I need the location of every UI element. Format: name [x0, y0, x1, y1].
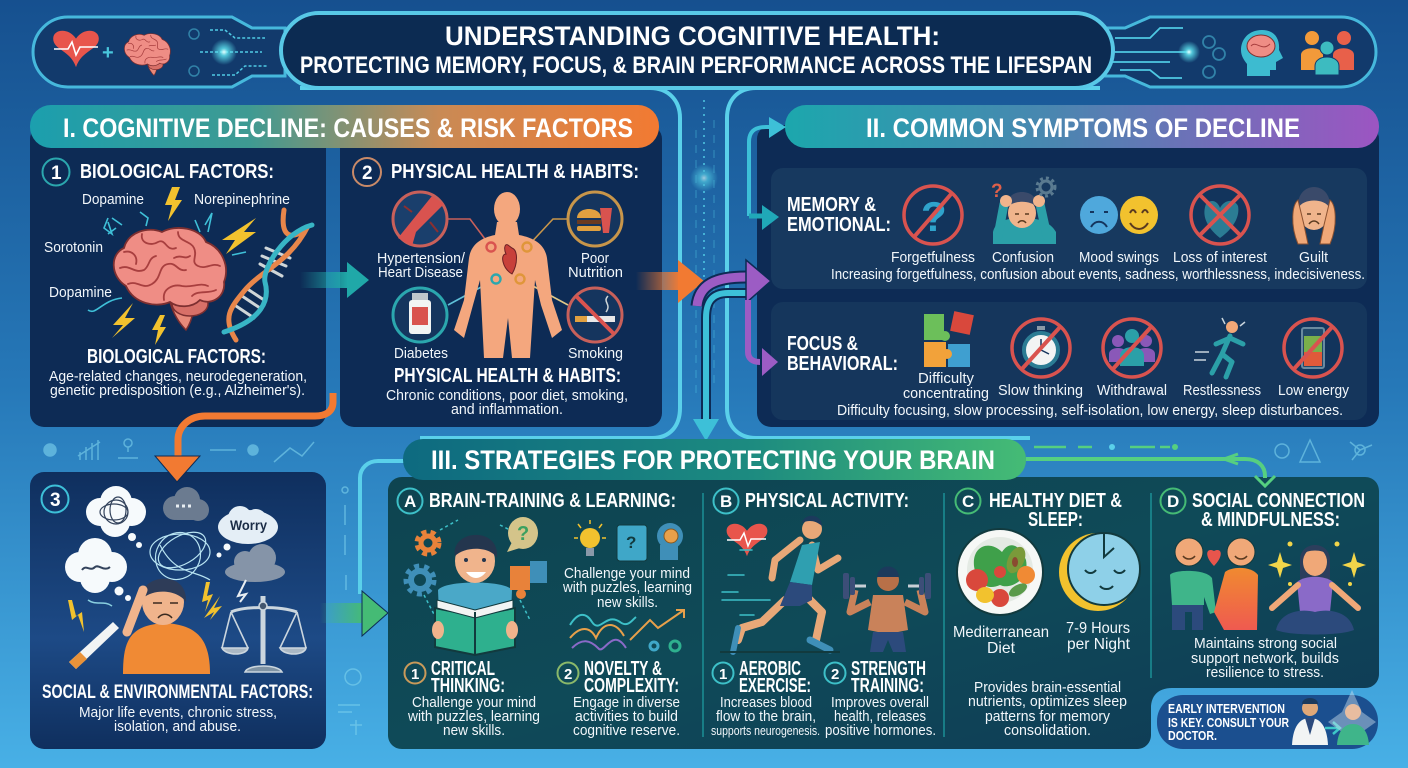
point 1 text: new skills.	[443, 722, 505, 739]
description: resilience to stress.	[1206, 664, 1324, 681]
description: isolation, and abuse.	[114, 718, 241, 735]
icon: group of people	[1301, 31, 1354, 75]
icon: question bubble: ?	[517, 523, 529, 545]
badge A: A	[404, 492, 416, 511]
description: and inflammation.	[451, 401, 563, 418]
callout text: EARLY INTERVENTION	[1168, 701, 1285, 716]
heading: HEALTHY DIET &	[989, 490, 1122, 512]
point 1 text: supports neurogenesis.	[711, 723, 820, 738]
icon: patient with glow	[1328, 690, 1376, 745]
point 1: THINKING:	[431, 675, 505, 697]
callout text: DOCTOR.	[1168, 728, 1217, 743]
arrow: social to strategies	[320, 461, 404, 636]
subpanel: memory and emotional	[771, 168, 1367, 289]
label: poor nutrition	[568, 250, 623, 281]
description: patterns for memory	[985, 708, 1110, 725]
plus sign: +	[102, 42, 114, 64]
symptom labels	[903, 370, 1349, 402]
arrow: biological to physical	[300, 262, 369, 298]
description: nutrients, optimizes sleep	[968, 693, 1127, 710]
label: sleep hours: per Night	[1067, 636, 1131, 653]
panel: strategies	[388, 477, 1379, 749]
icon: slow thinking	[1012, 319, 1070, 377]
point 2 text: Engage in diverse	[573, 694, 680, 711]
connector: title to panels	[300, 88, 1100, 438]
point 1 text	[711, 694, 820, 738]
point 2: 2	[831, 666, 839, 683]
section II header	[785, 105, 1379, 148]
point 2	[558, 658, 679, 697]
ground line	[720, 651, 840, 653]
icon: salad plate	[957, 529, 1043, 615]
point 1 text	[407, 694, 540, 739]
text block: Challenge your mind	[564, 565, 690, 582]
heading: BRAIN-TRAINING & LEARNING:	[429, 490, 676, 512]
symptom labels	[891, 249, 1329, 266]
icon: doctor	[1292, 698, 1328, 745]
label: mediterranean diet: Diet	[987, 640, 1016, 657]
symptom labels: Confusion	[992, 249, 1054, 266]
icon: question bubble	[507, 517, 538, 552]
subheading: PHYSICAL HEALTH & HABITS:	[394, 365, 621, 387]
subheading: SOCIAL & ENVIRONMENTAL FACTORS:	[42, 682, 313, 703]
icon: meditating woman	[1268, 542, 1366, 634]
description: Chronic conditions, poor diet, smoking,	[386, 387, 628, 404]
icon: moon clock	[1059, 533, 1140, 611]
column C: diet and sleep	[953, 488, 1140, 739]
symptom labels: Withdrawal	[1097, 382, 1167, 399]
arrow	[1325, 722, 1340, 734]
column D: social and mindfulness	[1160, 488, 1366, 681]
badge 2	[353, 158, 381, 186]
icon: loss of interest	[1191, 186, 1249, 244]
point 2 text: Improves overall	[831, 694, 929, 711]
point 2 text: activities to build	[575, 708, 678, 725]
icon: forgetfulness: ?	[921, 193, 947, 240]
text block: new skills.	[597, 594, 658, 611]
icon: puzzle	[924, 311, 974, 367]
label: sleep hours	[1066, 620, 1131, 653]
badge 3	[42, 486, 68, 512]
row heading: BEHAVIORAL:	[787, 353, 898, 375]
badge 1	[42, 158, 70, 186]
header right pill: people icons	[1100, 17, 1376, 87]
panel: physical health and habits	[340, 125, 662, 427]
column dividers	[703, 493, 1151, 737]
description: Maintains strong social	[1194, 635, 1337, 652]
badge C	[956, 488, 980, 514]
icon: balance scale	[222, 596, 306, 672]
description: Difficulty focusing, slow processing, self-isolation, low energy, sleep disturbances.	[837, 402, 1343, 419]
row heading	[787, 194, 891, 236]
circuit lines	[189, 29, 268, 76]
text block: with puzzles, learning	[562, 579, 692, 596]
symptom labels: Low energy	[1278, 382, 1349, 399]
text block	[562, 565, 692, 611]
column B: physical activity	[711, 488, 936, 739]
point 2 text	[573, 694, 680, 739]
heading: PHYSICAL ACTIVITY:	[745, 490, 909, 512]
symptom labels: Difficulty	[918, 370, 974, 387]
point 2: TRAINING:	[851, 675, 924, 697]
badge D: D	[1167, 492, 1179, 511]
label: hypertension: Heart Disease	[378, 264, 463, 281]
icon: stressed person	[123, 579, 210, 674]
central circuit decoration	[690, 100, 718, 420]
arrow: decline to panel 3	[155, 393, 333, 482]
label: sleep hours: 7-9 Hours	[1066, 620, 1130, 637]
description: Provides brain-essential	[974, 679, 1121, 696]
label: diabetes: Diabetes	[394, 345, 448, 362]
point 1 text: with puzzles, learning	[407, 708, 540, 725]
icon: DNA helix	[224, 210, 312, 340]
point 2 text: positive hormones.	[825, 722, 936, 739]
badge 3: 3	[50, 490, 61, 511]
label: poor nutrition: Poor	[581, 250, 609, 267]
section III header	[403, 439, 1026, 480]
point 2: NOVELTY &	[584, 658, 662, 680]
icon: withdrawal	[1103, 319, 1161, 377]
icon: confusion: ?	[991, 181, 1003, 202]
point 2: STRENGTH	[851, 658, 926, 680]
badge D	[1160, 488, 1186, 514]
row heading: MEMORY &	[787, 194, 876, 216]
heading	[989, 490, 1122, 531]
connector lines	[448, 219, 568, 305]
badge B	[714, 488, 738, 514]
icon: confusion	[991, 178, 1056, 244]
connector: strategies to social column	[1026, 444, 1275, 486]
icon: bulb, card and head	[574, 520, 683, 561]
icon: burger and drink	[568, 192, 622, 246]
icon: artery	[393, 192, 447, 246]
point 1: 1	[411, 666, 419, 683]
neurotransmitter labels: Norepinephrine	[194, 191, 290, 208]
label: mediterranean diet	[953, 624, 1049, 657]
label: poor nutrition: Nutrition	[568, 264, 623, 281]
heading text: II. COMMON SYMPTOMS OF DECLINE	[866, 113, 1300, 143]
icon: head with brain	[1241, 30, 1283, 76]
title	[281, 13, 1113, 88]
icon: low energy	[1284, 319, 1342, 377]
neurotransmitter labels: Sorotonin	[44, 239, 103, 256]
point 1: 1	[719, 666, 727, 683]
icon: waves and trend	[570, 610, 684, 651]
symptom labels: Guilt	[1299, 249, 1329, 266]
icon: brain	[124, 34, 170, 75]
heading text: I. COGNITIVE DECLINE: CAUSES & RISK FACTORS	[63, 113, 633, 143]
circuit lines	[1112, 28, 1225, 78]
subpanel: focus and behavioral	[771, 302, 1367, 420]
label: hypertension	[377, 250, 466, 281]
icon: thought clouds: Worry	[230, 517, 267, 533]
description: Major life events, chronic stress,	[79, 704, 277, 721]
icon: human body	[454, 192, 562, 358]
point 1 text: Increases blood	[720, 694, 812, 711]
row heading: FOCUS &	[787, 333, 858, 355]
heading: BIOLOGICAL FACTORS:	[80, 161, 274, 183]
icon: molecule squiggles	[88, 212, 246, 311]
badge 2: 2	[362, 163, 373, 184]
subheading: BIOLOGICAL FACTORS:	[87, 346, 266, 368]
title line 1: UNDERSTANDING COGNITIVE HEALTH:	[445, 21, 940, 51]
point 2: 2	[564, 666, 572, 683]
icon: puzzle pieces	[510, 561, 547, 599]
icon: mood swings	[1080, 196, 1158, 234]
point 1 text: Challenge your mind	[412, 694, 536, 711]
icon: guilt	[1293, 187, 1335, 244]
icon: lightning bolts	[112, 187, 256, 345]
row heading	[787, 333, 898, 375]
description	[49, 368, 307, 399]
section I header	[30, 105, 659, 148]
point 2: COMPLEXITY:	[584, 675, 679, 697]
arrow: physical to symptoms	[636, 260, 704, 303]
title line 2: PROTECTING MEMORY, FOCUS, & BRAIN PERFORMANCE ACROSS THE LIFESPAN	[300, 52, 1092, 79]
heading: SLEEP:	[1028, 509, 1083, 531]
point 1	[712, 658, 811, 697]
panel: common symptoms	[757, 125, 1379, 427]
neurotransmitter labels: Dopamine	[82, 191, 144, 208]
symptom labels: Restlessness	[1183, 382, 1261, 399]
icon: forgetfulness	[904, 186, 962, 244]
column A: brain training	[398, 488, 692, 739]
badge C: C	[962, 492, 974, 511]
callout text	[1168, 701, 1289, 743]
heading: PHYSICAL HEALTH & HABITS:	[391, 161, 639, 183]
badge B: B	[720, 492, 732, 511]
header left pill: heart and brain	[33, 17, 285, 87]
label: mediterranean diet: Mediterranean	[953, 624, 1049, 641]
neurotransmitter labels	[44, 191, 290, 301]
row heading: EMOTIONAL:	[787, 214, 891, 236]
icon: couple	[1170, 538, 1258, 630]
point 2 text	[825, 694, 936, 739]
heading: SOCIAL CONNECTION	[1192, 490, 1365, 512]
icon: medicine bottle	[393, 288, 447, 342]
icon: weightlifter	[843, 566, 931, 652]
point 2 text: health, releases	[834, 708, 926, 725]
icon: heart	[53, 31, 99, 67]
icon: cigarette	[69, 600, 119, 669]
heading	[1192, 490, 1365, 531]
badge A	[398, 488, 422, 514]
symptom labels: Mood swings	[1079, 249, 1159, 266]
heading text: III. STRATEGIES FOR PROTECTING YOUR BRAIN	[431, 445, 995, 475]
point 2	[824, 658, 926, 697]
point 1: EXERCISE:	[739, 675, 811, 697]
icon: brain	[114, 228, 226, 330]
point 2 text: cognitive reserve.	[573, 722, 680, 739]
description	[79, 704, 277, 735]
description: consolidation.	[1004, 722, 1091, 739]
icon: no smoking	[568, 288, 622, 342]
icon: thought clouds	[65, 486, 285, 602]
point 1: AEROBIC	[739, 658, 801, 680]
icon: bulb, card and head: ?	[626, 533, 636, 552]
description	[968, 679, 1127, 739]
label: smoking: Smoking	[568, 345, 623, 362]
point 1	[404, 658, 505, 697]
panel: biological factors	[30, 125, 326, 427]
icon: lightning bolts	[68, 582, 222, 632]
icon: heart	[727, 524, 767, 556]
description: Age-related changes, neurodegeneration,	[49, 368, 307, 385]
description	[1191, 635, 1339, 681]
panel: social and environmental factors	[30, 472, 326, 749]
callout: early intervention	[1157, 690, 1378, 749]
icon: student reading	[432, 535, 518, 655]
symptom labels: concentrating	[903, 385, 989, 402]
symptom labels: Loss of interest	[1173, 249, 1268, 266]
heading: & MINDFULNESS:	[1201, 509, 1340, 531]
icon: restlessness	[1194, 318, 1245, 377]
neurotransmitter labels: Dopamine	[49, 284, 112, 301]
point 1: CRITICAL	[431, 658, 495, 680]
icon: runner	[722, 516, 838, 652]
symptom labels: Slow thinking	[998, 382, 1083, 399]
arrows: symptom routing	[693, 117, 786, 441]
description: support network, builds	[1191, 650, 1339, 667]
description: genetic predisposition (e.g., Alzheimer's).	[50, 382, 305, 399]
description	[386, 387, 628, 418]
symptom labels: Forgetfulness	[891, 249, 975, 266]
badge 1: 1	[51, 163, 62, 184]
point 1 text: flow to the brain,	[716, 708, 816, 725]
decorative background icons	[44, 439, 1372, 735]
label: hypertension: Hypertension/	[377, 250, 466, 267]
icon: gears	[406, 520, 530, 622]
callout text: IS KEY. CONSULT YOUR	[1168, 715, 1289, 730]
